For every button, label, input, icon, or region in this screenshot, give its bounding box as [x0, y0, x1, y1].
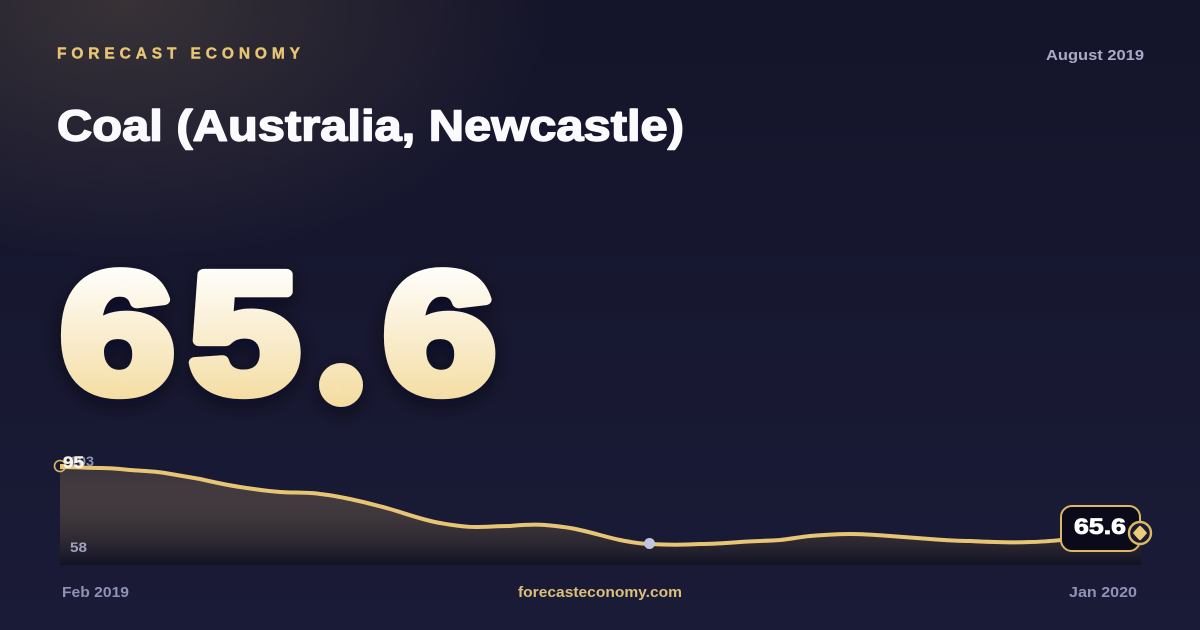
y axis max label: 103 [70, 453, 94, 469]
chart area fill [60, 467, 1141, 565]
date label: August 2019 [1046, 47, 1144, 64]
chart: sparkline [54, 453, 1151, 565]
midpoint marker [644, 538, 655, 549]
big value: 5 [189, 238, 300, 429]
start value: 95 [63, 453, 84, 472]
axis start date: Feb 2019 [62, 584, 129, 601]
y axis min label: 58 [70, 539, 87, 555]
axis end date: Jan 2020 [1069, 584, 1137, 601]
big value: 6 [383, 237, 496, 428]
website: forecasteconomy.com [518, 584, 682, 601]
big value: 6 [60, 238, 175, 429]
end value badge [1061, 506, 1140, 551]
end value badge: 65.6 [1074, 514, 1126, 539]
start marker [54, 460, 66, 472]
end marker [1129, 522, 1151, 544]
brand label: FORECAST ECONOMY [57, 46, 301, 62]
title: Coal (Australia, Newcastle) [57, 102, 684, 150]
chart line [60, 467, 1062, 545]
big value: . [335, 369, 342, 399]
big value [60, 237, 496, 429]
